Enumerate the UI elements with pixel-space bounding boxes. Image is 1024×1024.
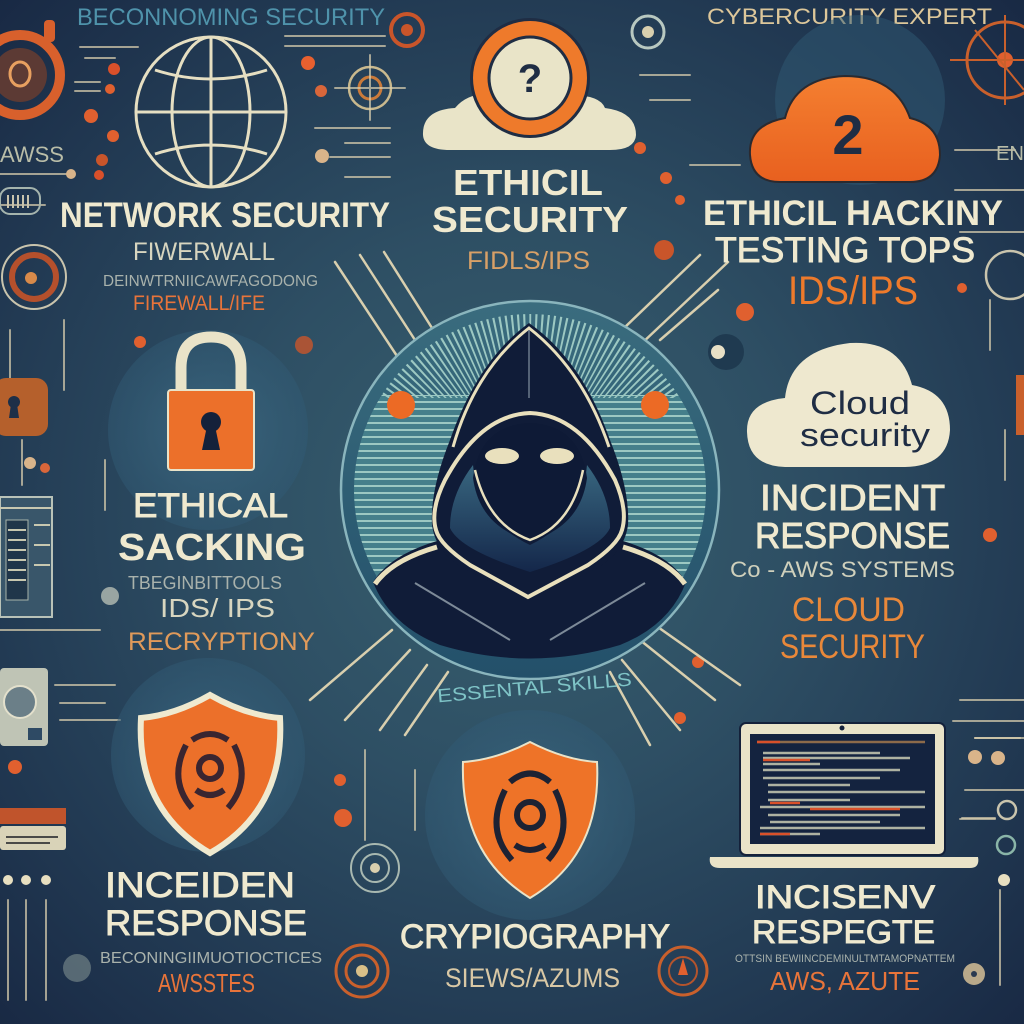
panel text: incident response left: BECONINGIIMUOTIOCTICES [100,950,322,967]
panel text: incident response right: AWS, AZUTE [770,966,920,996]
panel text: incident response right: OTTSIN BEWIINCDEMINULTMTAMOPNATTEM [735,953,955,965]
icon: crosshair top right [950,15,1024,105]
icon: device glyphs right of laptop [953,721,1024,977]
icon: round seal left [2,245,66,309]
radial spokes around the central emblem [310,252,740,745]
icon: shield with biohazard centre [425,710,635,920]
panel text: network security: NETWORK SECURITY [60,196,390,235]
panel text: incident response left: INCEIDEN [105,866,295,905]
panel text: ethical security: SECURITY [432,199,628,240]
panel text: cryptography [400,918,670,993]
panel text: ethical hacking tools: IDS/ IPS [160,593,275,623]
icon: laptop with code [710,723,978,868]
panel text: ethical hacking: ETHICIL HACKINY [703,194,1003,233]
panel text: ethical hacking: TESTING TOPS [715,231,975,270]
panel text: incident response left: AWSSTES [158,968,255,998]
icon: small server left [0,188,40,214]
decorative circuit lines and nodes, left [0,36,415,1000]
label: essential skills: ESSENTAL SKILLS [436,669,633,707]
panel text: cryptography: CRYPIOGRAPHY [400,918,670,956]
panel text: incident response and cloud security: CLOUD [792,591,905,629]
icon: target badge top right of globe [335,55,405,120]
icon: orange cloud with number: 2 [832,103,864,166]
panel text: ethical hacking: IDS/IPS [788,269,918,313]
title: top right header: CYBERCURITY EXPERT [707,4,992,29]
panel text: ethical hacking tools: TBEGINBITTOOLS [128,573,282,593]
icon: shield with biohazard left [111,658,305,853]
panel text: ethical security [432,162,628,275]
panel text: incident response and cloud security: Co - AWS SYSTEMS [730,557,955,582]
panel text: incident response right: INCISENV [755,879,936,915]
panel text: network security: FIREWALL/IFE [133,292,265,315]
icon: globe [136,37,286,187]
panel text: incident response right: RESPEGTE [752,914,935,950]
panel text: ethical hacking tools: ETHICAL [133,487,288,525]
text: AWSS left label: AWSS [0,142,64,167]
panel text: ethical hacking tools: RECRYPTIONY [128,628,315,656]
icon: keyhole badge left edge [0,378,48,436]
panel text: incident response right [735,879,955,996]
panel text: cryptography: SIEWS/AZUMS [445,963,620,993]
panel text: incident response left [100,866,322,998]
title: top left header: BECONNOMING SECURITY [77,4,385,31]
icon: gauge right edge [986,251,1024,435]
panel text: ethical hacking tools [118,487,315,656]
icon: small ring top centre [391,14,664,48]
panel text: incident response and cloud security: SECURITY [780,628,925,666]
disc [341,301,719,679]
text: right edge label: EN [996,143,1024,165]
icon: device strip bottom left [0,808,66,850]
icon: orange target gauge top left [0,20,60,115]
panel text: network security: FIWERWALL [133,238,275,266]
icon: cloud with orange keyhole ring: ? [518,57,542,101]
panel text: ethical security: ETHICIL [453,162,603,203]
icon: padlock [108,330,308,530]
icon: cream cloud with cloud security [747,343,950,467]
orange dots [387,391,669,419]
panel text: network security [60,196,390,315]
icon: cream cloud with cloud security: Cloud [810,385,910,421]
icon: disk drive left [0,668,48,746]
panel text: ethical hacking tools: SACKING [118,527,306,569]
panel text: network security: DEINWTRNIICAWFAGODONG [103,273,318,290]
icon: orange cloud with number [750,15,945,185]
stripes [354,314,706,578]
panel text: incident response and cloud security: RESPONSE [755,515,950,556]
hood and cloak [373,323,686,658]
icon: small round mesh bottom [63,844,985,997]
panel text: ethical hacking [703,194,1003,313]
icon: cloud with orange keyhole ring [423,18,636,150]
panel text: incident response left: RESPONSE [105,904,307,943]
panel text: ethical security: FIDLS/IPS [467,247,590,275]
decorative circuit lines and nodes, right [634,75,1024,985]
icon: cream cloud with cloud security: security [800,417,930,453]
panel text: incident response and cloud security: INCIDENT [760,477,945,518]
panel text: incident response and cloud security [730,477,955,666]
panel: central hooded hacker emblem [340,301,720,679]
icon: server rack left [0,497,52,617]
